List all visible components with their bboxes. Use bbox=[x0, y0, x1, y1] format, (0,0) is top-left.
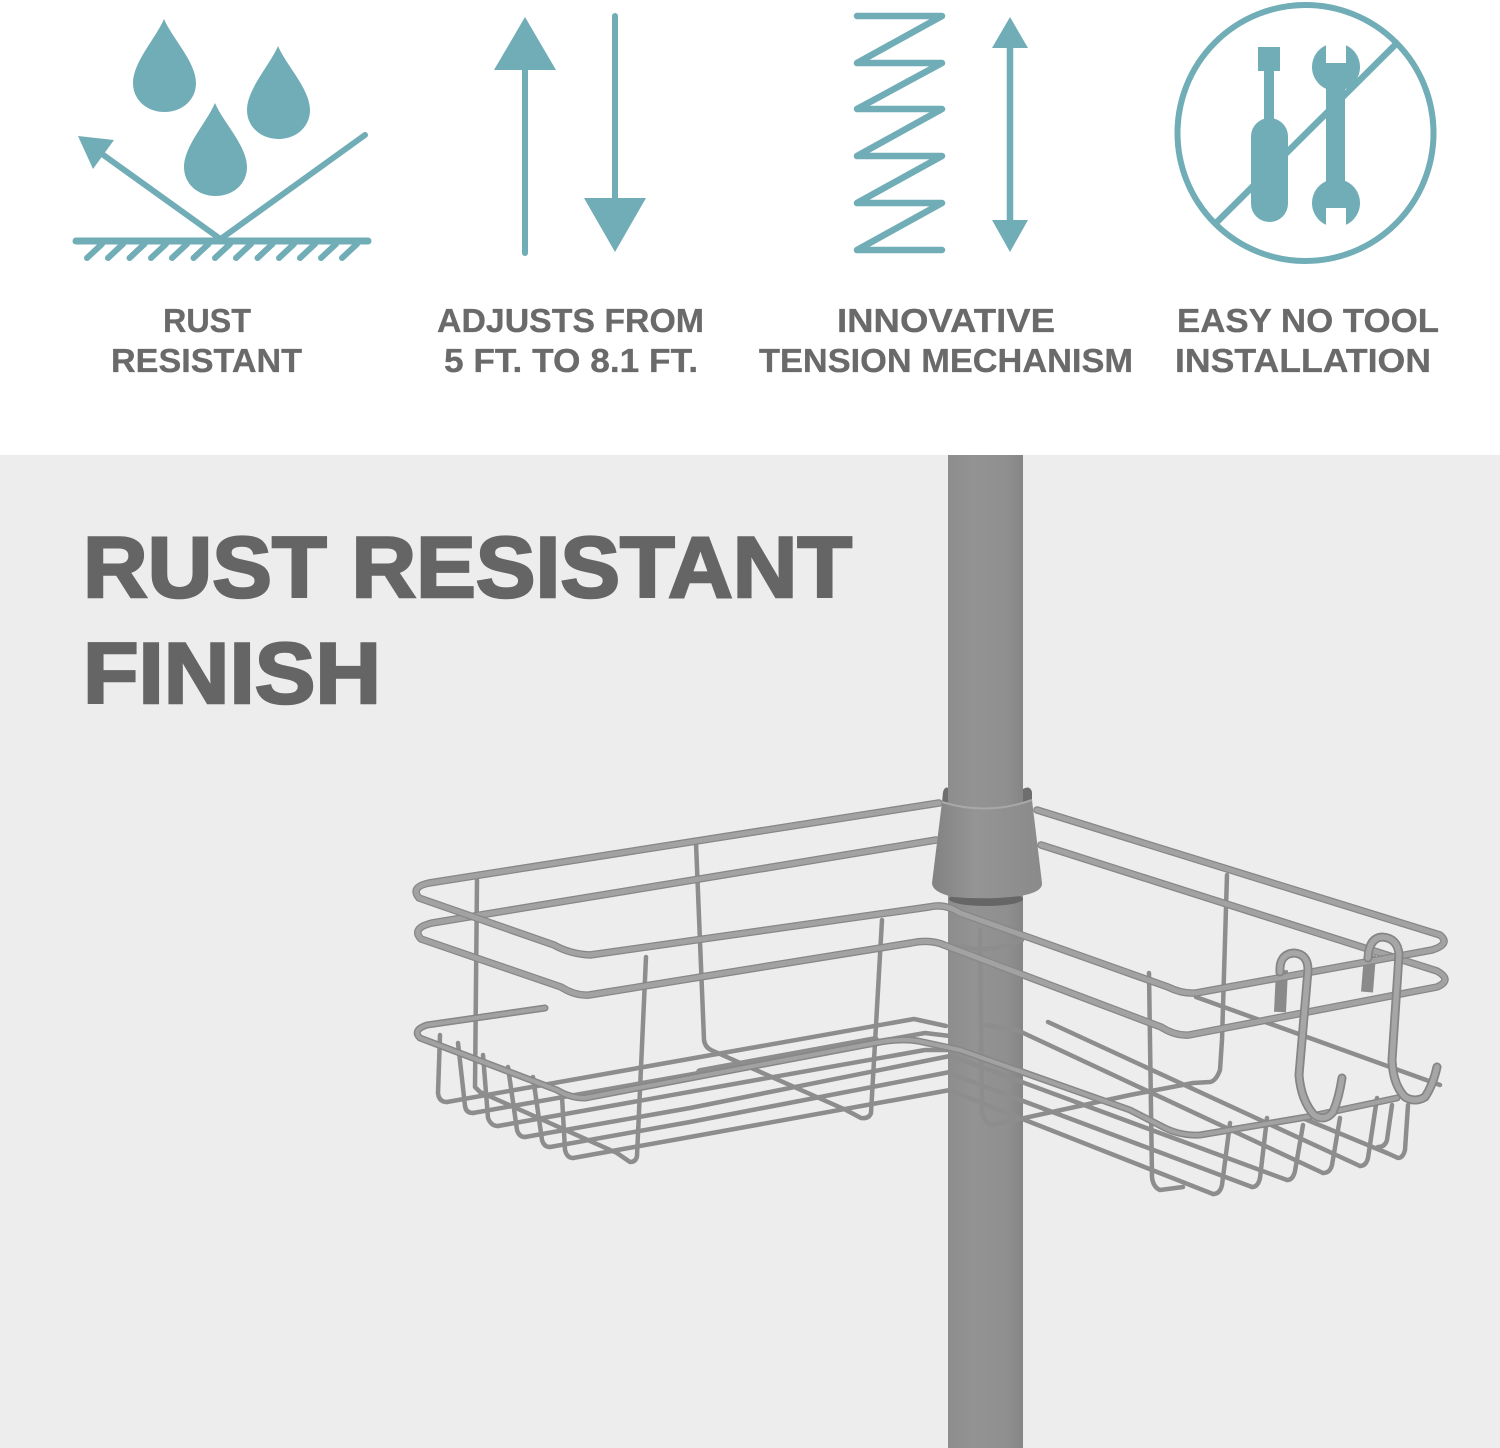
icon: tension spring and double arrow bbox=[857, 16, 1028, 252]
label: easy no tool installation: INSTALLATION bbox=[1175, 342, 1431, 379]
icon: no tools needed bbox=[1178, 5, 1434, 261]
label: adjusts from 5 ft. to 8.1 ft. bbox=[437, 302, 704, 379]
basket left side wire loops bbox=[438, 1035, 573, 1158]
label: innovative tension mechanism bbox=[759, 302, 1133, 379]
label: innovative tension mechanism: INNOVATIVE bbox=[837, 302, 1055, 339]
icon: rust resistant water drops bbox=[76, 19, 368, 258]
water drops bbox=[133, 19, 310, 196]
label: adjusts from 5 ft. to 8.1 ft.: ADJUSTS FROM bbox=[437, 302, 704, 339]
hatched surface bbox=[76, 241, 368, 258]
basket vertical support wires bbox=[475, 843, 1227, 1190]
label: adjusts from 5 ft. to 8.1 ft.: 5 FT. TO 8.1 FT. bbox=[444, 342, 698, 379]
heading: rust resistant finish: RUST RESISTANT bbox=[83, 520, 852, 616]
white top band bbox=[0, 0, 1500, 455]
heading: rust resistant finish bbox=[83, 520, 852, 722]
wire corner basket bbox=[416, 780, 1445, 1194]
label: rust resistant: RUST bbox=[163, 302, 251, 339]
icon: height adjustment arrows bbox=[494, 16, 646, 253]
label: easy no tool installation bbox=[1175, 302, 1439, 379]
basket floor wires bbox=[447, 997, 1440, 1194]
basket right side wire loops bbox=[1213, 1098, 1408, 1194]
panel: product photo background bbox=[0, 455, 1500, 1448]
hook rear legs bbox=[1280, 955, 1370, 1012]
wrench bbox=[1312, 38, 1360, 233]
screwdriver bbox=[1251, 47, 1288, 222]
shower caddy pole bbox=[948, 455, 1023, 1448]
S hooks bbox=[1280, 937, 1437, 1118]
label: innovative tension mechanism: TENSION MECHANISM bbox=[759, 342, 1133, 379]
label: easy no tool installation: EASY NO TOOL bbox=[1177, 302, 1439, 339]
upper rails bbox=[416, 803, 1445, 1035]
bottom rim rail bbox=[417, 1008, 1397, 1135]
pole collar bbox=[932, 780, 1042, 906]
label: rust resistant bbox=[111, 302, 302, 379]
heading: rust resistant finish: FINISH bbox=[83, 626, 381, 722]
deflection arrows bbox=[78, 135, 365, 238]
label: rust resistant: RESISTANT bbox=[111, 342, 302, 379]
